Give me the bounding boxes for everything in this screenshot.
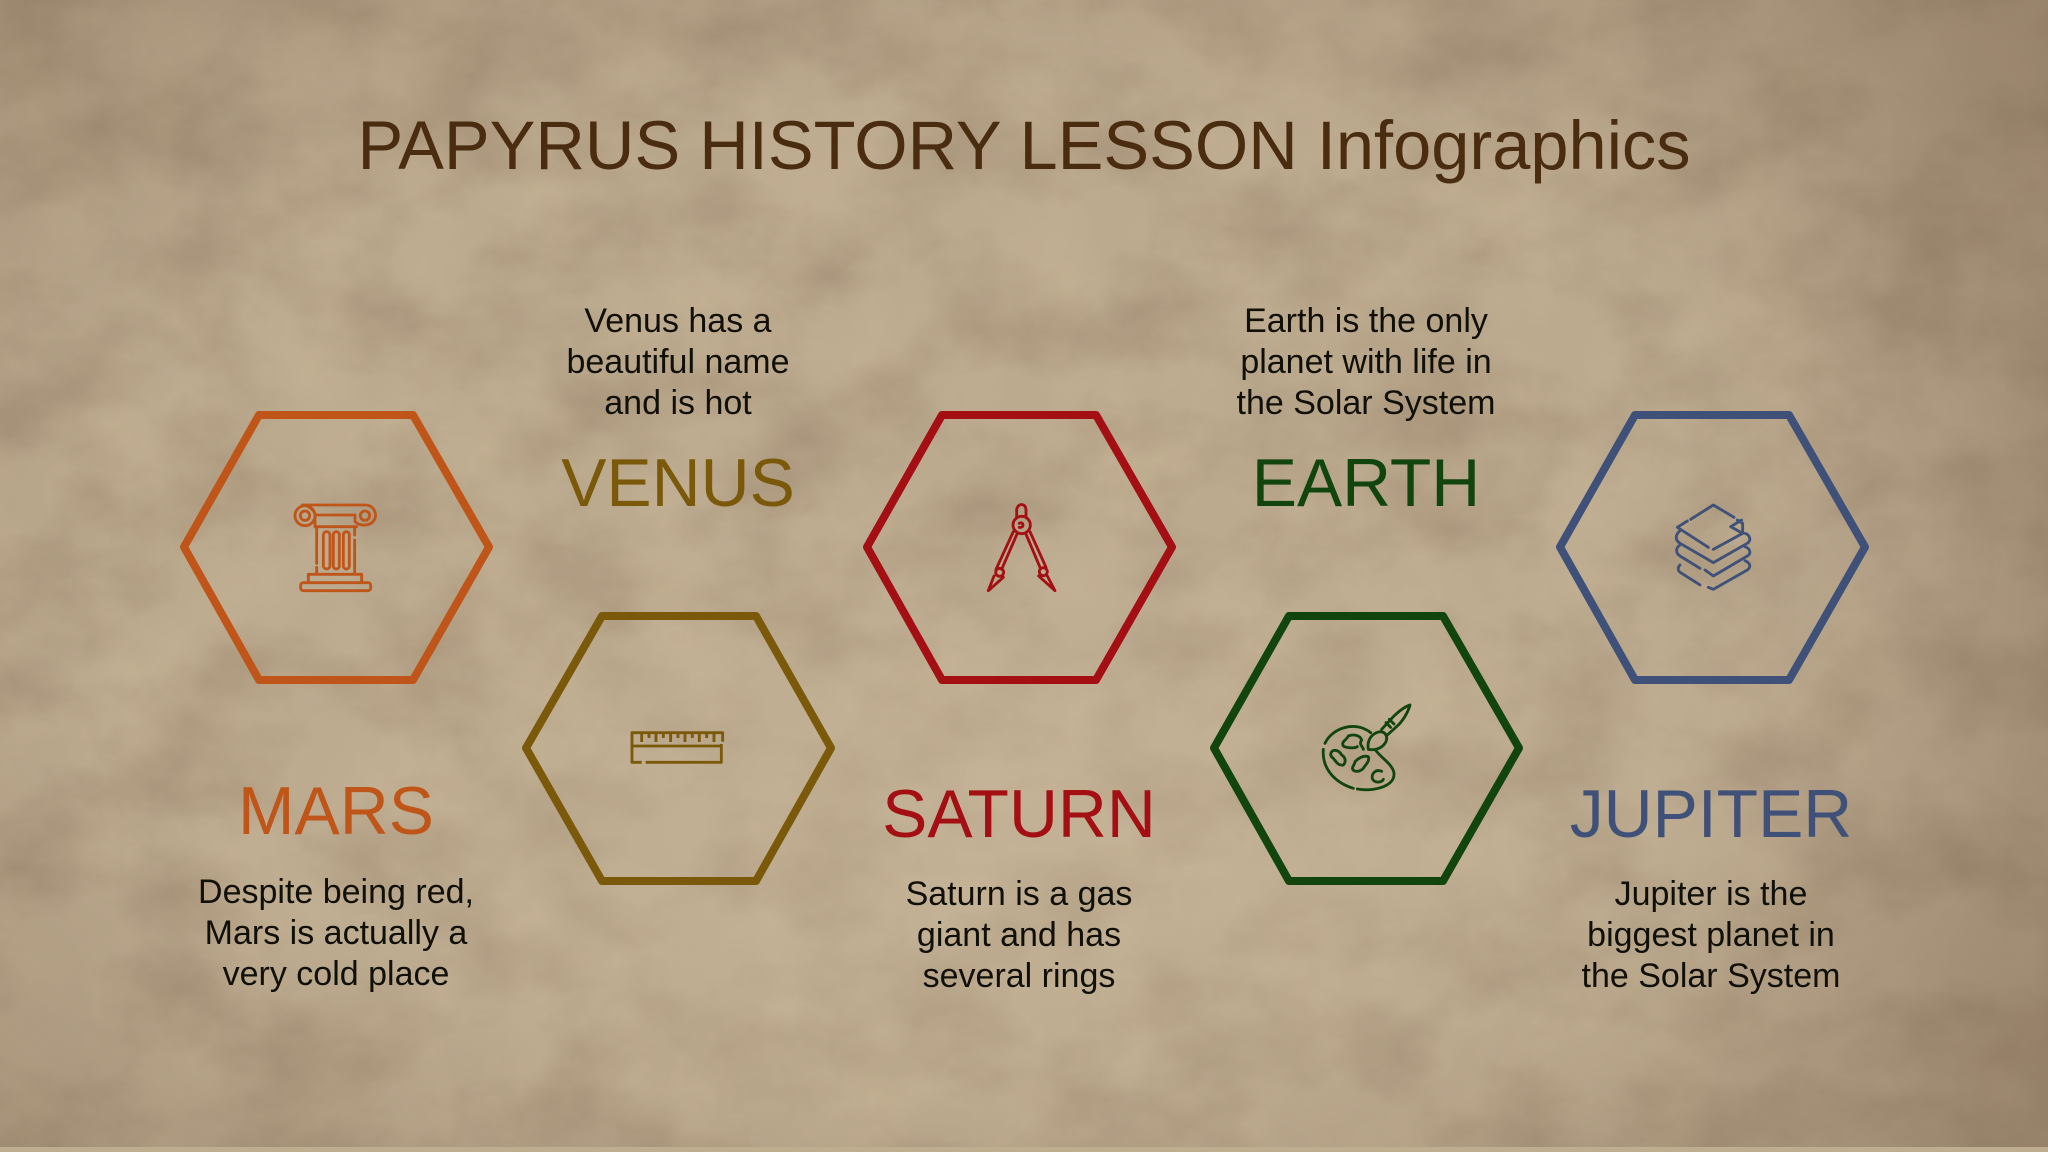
hexagon: Venus — [526, 616, 831, 881]
icon: compass — [988, 504, 1055, 591]
panel: Mars — [184, 415, 489, 993]
hexagon: Earth — [1214, 616, 1519, 881]
text: Venus description: beautiful name — [566, 343, 790, 381]
icon: column — [295, 505, 376, 591]
text: Saturn description: Saturn is a gas — [906, 875, 1132, 913]
text: Mars description: Mars is actually a — [205, 914, 467, 952]
icon: ruler — [632, 733, 723, 762]
text: Earth description: the Solar System — [1237, 384, 1495, 422]
panel: Jupiter — [1560, 415, 1865, 995]
label: EARTH: EARTH — [1252, 446, 1480, 521]
text: Mars description: very cold place — [223, 955, 449, 993]
label: SATURN: SATURN — [882, 777, 1156, 852]
text: Jupiter description: the Solar System — [1582, 957, 1840, 995]
panel: Venus — [526, 302, 831, 881]
hexagon: Mars — [184, 415, 489, 680]
text: Earth description: Earth is the only — [1244, 302, 1488, 340]
panel: Earth — [1214, 302, 1519, 881]
label: MARS: MARS — [238, 774, 434, 849]
icon: layers — [1676, 505, 1750, 589]
hexagon: Jupiter — [1560, 415, 1865, 680]
label: JUPITER: JUPITER — [1570, 777, 1852, 852]
text: Earth description: planet with life in — [1240, 343, 1492, 381]
text: Venus description: Venus has a — [584, 302, 772, 340]
title: PAPYRUS HISTORY LESSON Infographics — [357, 107, 1691, 184]
label: VENUS: VENUS — [561, 446, 795, 521]
panel: Saturn — [867, 415, 1172, 995]
text: Jupiter description: biggest planet in — [1587, 916, 1835, 954]
text: Saturn description: giant and has — [917, 916, 1121, 954]
icon: palette — [1323, 705, 1410, 790]
text: Saturn description: several rings — [923, 957, 1115, 995]
text: Venus description: and is hot — [604, 384, 752, 422]
text: Mars description: Despite being red, — [198, 873, 474, 911]
hexagon: Saturn — [867, 415, 1172, 680]
text: Jupiter description: Jupiter is the — [1615, 875, 1807, 913]
